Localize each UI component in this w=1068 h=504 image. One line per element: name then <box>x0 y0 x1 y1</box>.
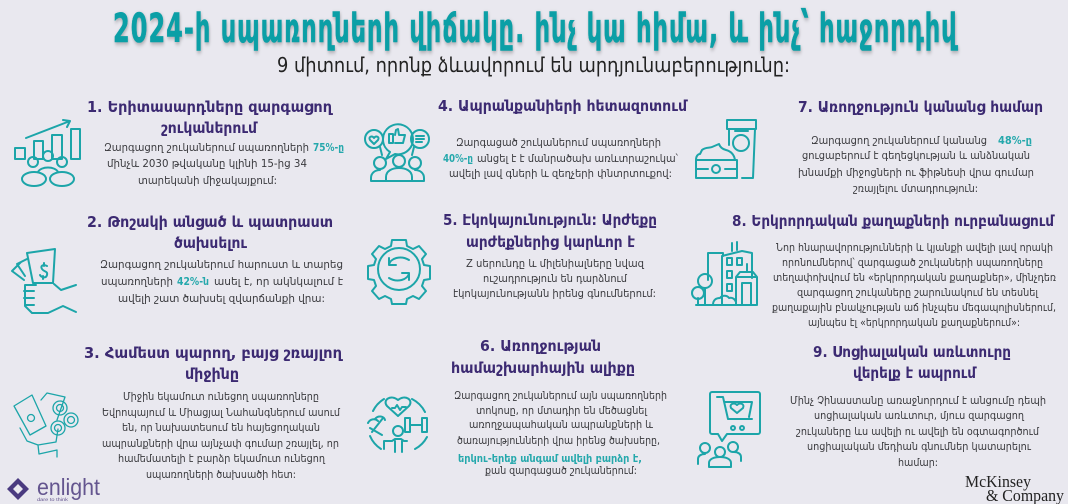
body text: Զարգացող շուկաներում այն սպառողների <box>454 389 667 402</box>
icon: hand with cash and coins <box>14 393 78 457</box>
body text: ուշադրություն են դարձնում <box>483 272 628 285</box>
icon: speech bubbles and people <box>365 124 429 181</box>
body text: զարգացող շուկաները շարունակում են տեսնել <box>797 286 1039 299</box>
body text: են, որ նախատեսում են հայեցողական <box>122 421 320 434</box>
body text: շուկաները ևս ավելի ու ավելի են օգտագործում <box>796 425 1040 438</box>
icon: gear with cycle arrows <box>368 240 430 304</box>
icon: health circle with heart and dumbbell <box>368 398 427 452</box>
logo: enlight: dare to think <box>37 497 69 502</box>
body text: տարեկանի միջակայքում: <box>138 174 277 187</box>
icon: growth chart and people <box>15 120 80 186</box>
body text: 75%-ը <box>313 141 344 154</box>
heading: շուկաներում <box>161 119 258 137</box>
heading <box>84 344 343 383</box>
heading: արժեքներից կարևոր է <box>466 233 635 251</box>
body text: 40%-ը <box>443 152 473 165</box>
logo: McKinsey & Company: McKinsey <box>965 472 1031 491</box>
body text: համեմատելի է բարձր եկամուտ ունեցող <box>118 452 326 465</box>
body text: մինչև 2030 թվականը կլինի 15-ից 34 <box>107 157 307 170</box>
body text <box>453 257 656 300</box>
body text: ավելի շատ ծախսել զվարճանքի վրա: <box>118 292 325 305</box>
logo: McKinsey & Company <box>965 472 1064 504</box>
body text: սպառողների <box>101 275 173 288</box>
body text <box>102 390 341 481</box>
title: 2024-ի սպառողների վիճակը. ինչ կա հիմա, և ինչ՝ հաջորդիվ <box>113 4 959 52</box>
body text <box>772 241 1056 329</box>
body text <box>104 141 344 187</box>
panel: trend 2 retired and ready to spend <box>12 213 343 313</box>
panel: trend 6 health wave <box>368 337 667 477</box>
body text: 48%-ը <box>998 134 1032 147</box>
panel: trend 5 sustainability <box>368 211 657 304</box>
body text: սոցիալական առևտուր, մյուս զարգացող <box>814 409 1025 422</box>
icon: city buildings and trees <box>692 242 757 305</box>
heading <box>87 213 333 252</box>
panel: trend 1 young consumers <box>15 98 344 187</box>
body text: Զարգացող շուկաներում հարուստ և տարեց <box>100 258 343 271</box>
panel: trend 7 health for women <box>696 98 1043 195</box>
panel: trend 3 modest but spending middle <box>14 344 343 481</box>
body text <box>798 134 1034 195</box>
icon: shopping cart bubble and people <box>698 392 760 467</box>
heading: վերելք է ապրում <box>853 364 977 382</box>
heading <box>813 343 1011 382</box>
body text: երկու-երեք անգամ ավելի բարձր է, <box>458 452 642 465</box>
body text: խնամքի միջոցների ու ֆիթնեսի վրա գումար <box>798 166 1034 179</box>
heading <box>443 211 657 251</box>
body text: ցուցաբերում է գեղեցկության և անձնական <box>802 149 1030 162</box>
body text: Զարգացող շուկաներում սպառողների <box>104 141 309 154</box>
heading <box>87 98 333 137</box>
heading: համաշխարհային ալիքը <box>451 359 635 377</box>
body text: Միջին եկամուտ ունեցող սպառողները <box>123 390 319 403</box>
icon: hand holding money <box>12 249 76 313</box>
body text: Z սերունդը և միլենիալները նվազ <box>466 257 645 270</box>
body text: տոկոսը, որ մտադիր են մեծացնել <box>476 404 648 417</box>
heading: 1. Երիտասարդները զարգացող <box>87 98 333 116</box>
body text <box>790 394 1046 469</box>
panel: trend 9 social commerce <box>698 343 1046 469</box>
body text <box>443 136 678 180</box>
body text: Զարգացող շուկաներում կանանց <box>811 134 987 147</box>
body text <box>100 258 343 305</box>
body text: 42%-ն <box>177 275 209 288</box>
body text: քան զարգացած շուկաներում: <box>485 464 637 477</box>
body text: սոցիալական մեդիան գնումներ կատարելու <box>807 440 1031 453</box>
heading: միջինը <box>185 365 239 383</box>
body text <box>454 389 667 477</box>
heading <box>451 337 635 377</box>
body text: առողջապահական ապրանքների և <box>469 418 653 431</box>
body text: սպառողների ծախսածի հետ: <box>146 468 296 481</box>
icon: cream tube and jar <box>696 120 756 178</box>
body text: ավելի լավ գների և զեղչերի փնտրտուքով: <box>449 167 672 180</box>
heading: 5. Էկոկայունություն: Արժեքը <box>443 211 657 229</box>
body text: համար: <box>898 456 938 469</box>
heading: 9. Սոցիալական առևտուրը <box>813 343 1011 361</box>
heading: 6. Առողջության <box>480 337 601 355</box>
body text: Զարգացած շուկաներում սպառողների <box>456 136 661 149</box>
heading: 3. Համեստ պարող, բայց շռայլող <box>84 344 343 362</box>
heading: 2. Թոշակի անցած և պատրաստ <box>87 213 333 231</box>
body text: շռայլելու մտադրություն: <box>853 182 978 195</box>
heading: ծախսելու <box>174 234 248 252</box>
body text: Եվրոպայում և Միացյալ Նահանգներում ասում <box>102 406 341 419</box>
heading: 7. Առողջություն կանանց համար <box>798 98 1043 116</box>
body text: ծառայությունների վրա իրենց ծախսերը, <box>457 434 660 447</box>
panel: trend 8 second-tier cities <box>692 212 1056 329</box>
subtitle: 9 միտում, որոնք ձևավորում են արդյունաբերությունը: <box>277 53 790 77</box>
body text: ապրանքների վրա այնչափ գումար շռայլել, որ <box>102 437 339 450</box>
body text: ասել է, որ ակնկալում է <box>214 275 343 288</box>
logo: enlight <box>7 474 101 502</box>
logo: enlight: enlight <box>37 474 101 500</box>
panel: trend 4 brand exploration <box>365 97 688 181</box>
body text: անցել է է մանրածախ առևտրաշուկա՝ <box>477 152 678 165</box>
body text: այնպես էլ «երկրորդական քաղաքներում»: <box>808 316 1020 329</box>
heading: 4. Ապրանքանիերի հետազոտում <box>438 97 688 115</box>
body text: էկոկայունությանն իրենց գնումներում: <box>453 287 656 300</box>
